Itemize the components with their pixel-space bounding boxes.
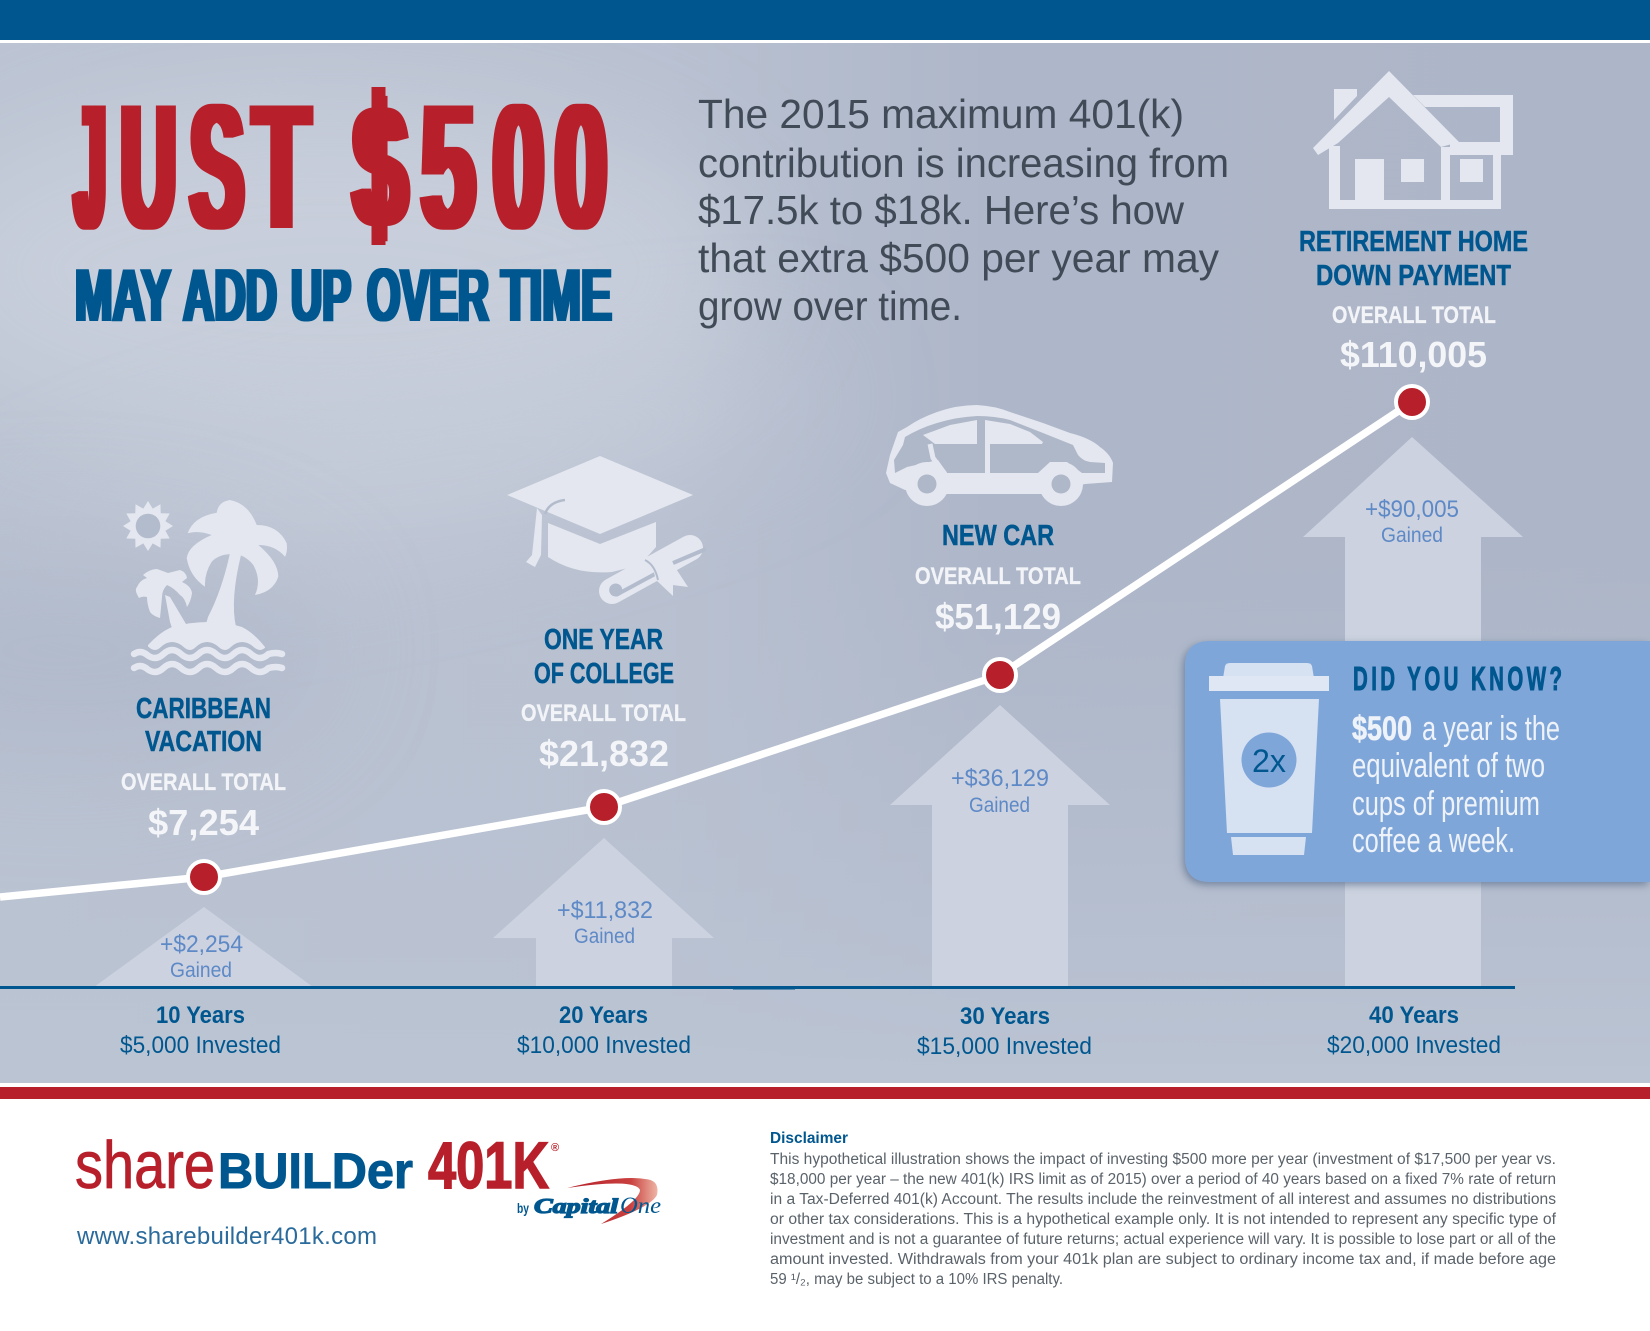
disclaimer: Disclaimer xyxy=(770,1130,848,1147)
gain label: 40 years: +$90,005 xyxy=(1365,496,1459,523)
intro text block: contribution is increasing from xyxy=(698,140,1229,186)
title line: May add up over time: TIME xyxy=(501,253,612,337)
footer rule xyxy=(0,1083,1650,1087)
axis label: 10 years: 10 Years xyxy=(156,1002,245,1029)
icon: car xyxy=(886,405,1113,506)
disclaimer xyxy=(770,1130,1557,1288)
title line: Just $500: 5 xyxy=(421,67,475,266)
intro text block: $17.5k to $18k. Here’s how xyxy=(698,187,1184,233)
axis label: 10 years: $5,000 Invested xyxy=(120,1032,281,1059)
axis label: 20 years: $10,000 Invested xyxy=(517,1032,691,1059)
label: Retirement home down payment: RETIREMENT HOME xyxy=(1299,226,1528,258)
intro text block: that extra $500 per year may xyxy=(698,235,1219,281)
axis label: 30 years xyxy=(917,1003,1092,1060)
label: Caribbean vacation xyxy=(121,693,286,843)
label: Retirement home down payment xyxy=(1299,226,1528,375)
title line: May add up over time xyxy=(75,253,612,337)
title xyxy=(75,67,612,337)
gain label: 40 years xyxy=(1365,496,1459,547)
axis label: 40 years: $20,000 Invested xyxy=(1327,1032,1501,1059)
logo: ShareBuilder 401K by Capital One xyxy=(75,1128,661,1224)
label: New car xyxy=(915,520,1081,637)
label: Caribbean vacation: CARIBBEAN xyxy=(136,693,271,725)
disclaimer: 59 ¹/₂, may be subject to a 10% IRS penalty. xyxy=(770,1271,1063,1288)
label: Caribbean vacation: $7,254 xyxy=(148,802,259,843)
gain label: 10 years: Gained xyxy=(170,959,232,982)
axis label: 20 years: 20 Years xyxy=(559,1002,648,1029)
callout text: $500 xyxy=(1352,710,1412,748)
gain label: 30 years: +$36,129 xyxy=(951,765,1049,792)
label: One year of college: ONE YEAR xyxy=(544,624,663,656)
logo: ShareBuilder 401K by Capital One: share xyxy=(75,1128,215,1203)
data point: 40 years xyxy=(1396,386,1428,418)
callout text: cups of premium xyxy=(1352,785,1540,823)
logo: ShareBuilder 401K by Capital One: by xyxy=(517,1200,529,1216)
title line: May add up over time: ADD xyxy=(183,253,277,337)
top header band xyxy=(0,0,1650,40)
callout text: coffee a week. xyxy=(1352,822,1515,860)
icon: graduation cap and diploma xyxy=(507,456,706,596)
label: New car: NEW CAR xyxy=(942,520,1054,552)
axis label: 10 years xyxy=(120,1002,281,1059)
title line: Just $500: 0 xyxy=(555,67,607,266)
data point: 20 years xyxy=(588,791,620,823)
icon: palm island xyxy=(123,500,287,672)
arrow: 20 years gain xyxy=(493,838,714,987)
disclaimer: $18,000 per year – the new 401(k) IRS limit as of 2015) over a period of 40 years based on a fixed 7% rate of return xyxy=(770,1171,1556,1188)
label: Retirement home down payment: OVERALL TOTAL xyxy=(1332,302,1496,329)
logo: ShareBuilder 401K by Capital One: BUILDer xyxy=(218,1143,413,1199)
gain label: 30 years xyxy=(951,765,1049,817)
label: One year of college xyxy=(521,624,686,774)
logo: ShareBuilder 401K by Capital One: 401K xyxy=(428,1128,549,1202)
title line: May add up over time: MAY xyxy=(75,253,171,337)
timeline axis xyxy=(0,986,1515,990)
label: New car: $51,129 xyxy=(935,596,1061,637)
title line: Just $500: T xyxy=(253,67,310,266)
callout text xyxy=(1352,710,1560,860)
title line: Just $500 xyxy=(75,67,607,266)
label: Caribbean vacation: VACATION xyxy=(145,726,262,758)
disclaimer: in a Tax-Deferred 401(k) Account. The results include the reinvestment of all interest and assumes no distributions xyxy=(770,1191,1556,1208)
disclaimer: amount invested. Withdrawals from your 401k plan are subject to ordinary income tax and, if made before age xyxy=(770,1251,1556,1268)
axis label: 40 years xyxy=(1327,1002,1501,1059)
disclaimer: investment and is not a guarantee of future returns; actual experience will vary. It is possible to lose part or all of the xyxy=(770,1231,1556,1248)
label: One year of college: OF COLLEGE xyxy=(534,658,674,690)
website url: www.sharebuilder401k.com xyxy=(76,1223,377,1250)
logo: ShareBuilder 401K by Capital One: Capital xyxy=(534,1194,618,1218)
gain label: 10 years: +$2,254 xyxy=(160,931,243,958)
logo: ShareBuilder 401K by Capital One: ® xyxy=(551,1142,559,1154)
gain label: 20 years xyxy=(557,897,653,948)
title line: May add up over time: OVER xyxy=(367,253,489,337)
axis label: 20 years xyxy=(517,1002,691,1059)
icon: coffee cup xyxy=(1209,663,1329,855)
gain label: 10 years xyxy=(160,931,243,982)
title line: Just $500: 0 xyxy=(493,67,544,266)
label: Caribbean vacation: OVERALL TOTAL xyxy=(121,769,286,796)
intro text block xyxy=(698,91,1229,329)
title line: May add up over time: UP xyxy=(291,253,351,337)
icon: coffee cup: 2x xyxy=(1252,743,1286,779)
gain label: 20 years: Gained xyxy=(574,925,635,948)
callout text: a year is the xyxy=(1422,710,1560,748)
title line: Just $500: $ xyxy=(353,67,407,266)
data point: 10 years xyxy=(188,861,220,893)
label: One year of college: $21,832 xyxy=(539,733,669,774)
title line: Just $500: S xyxy=(190,67,244,266)
gain label: 40 years: Gained xyxy=(1381,524,1443,547)
arrow: 40 years gain xyxy=(1303,437,1523,987)
callout: did you know xyxy=(1185,641,1650,882)
gain label: 30 years: Gained xyxy=(969,794,1030,817)
label: Retirement home down payment: DOWN PAYMENT xyxy=(1316,260,1511,292)
axis label: 40 years: 40 Years xyxy=(1369,1002,1459,1029)
gain label: 20 years: +$11,832 xyxy=(557,897,653,924)
intro text block: grow over time. xyxy=(698,283,962,329)
label: Retirement home down payment: $110,005 xyxy=(1340,334,1487,375)
intro text block: The 2015 maximum 401(k) xyxy=(698,91,1184,137)
background panel xyxy=(0,43,1650,1083)
logo: ShareBuilder 401K by Capital One: One xyxy=(620,1193,661,1218)
arrow: 10 years gain xyxy=(94,907,313,987)
axis label: 30 years: 30 Years xyxy=(960,1003,1050,1030)
disclaimer: This hypothetical illustration shows the impact of investing $500 more per year (investment of $17,500 per year vs. xyxy=(770,1151,1556,1168)
callout heading: DID YOU KNOW? xyxy=(1353,660,1562,697)
icon: house xyxy=(1313,71,1513,209)
axis label: 30 years: $15,000 Invested xyxy=(917,1033,1092,1060)
title line: Just $500: U xyxy=(121,67,176,266)
disclaimer: or other tax considerations. This is a hypothetical example only. It is not intended to represent any specific type of xyxy=(770,1211,1557,1228)
data point: 30 years xyxy=(984,659,1016,691)
title line: Just $500: J xyxy=(75,67,105,266)
growth line xyxy=(0,402,1412,897)
label: New car: OVERALL TOTAL xyxy=(915,563,1081,590)
arrow: 30 years gain xyxy=(890,705,1110,987)
callout text: equivalent of two xyxy=(1352,747,1545,785)
label: One year of college: OVERALL TOTAL xyxy=(521,700,686,727)
